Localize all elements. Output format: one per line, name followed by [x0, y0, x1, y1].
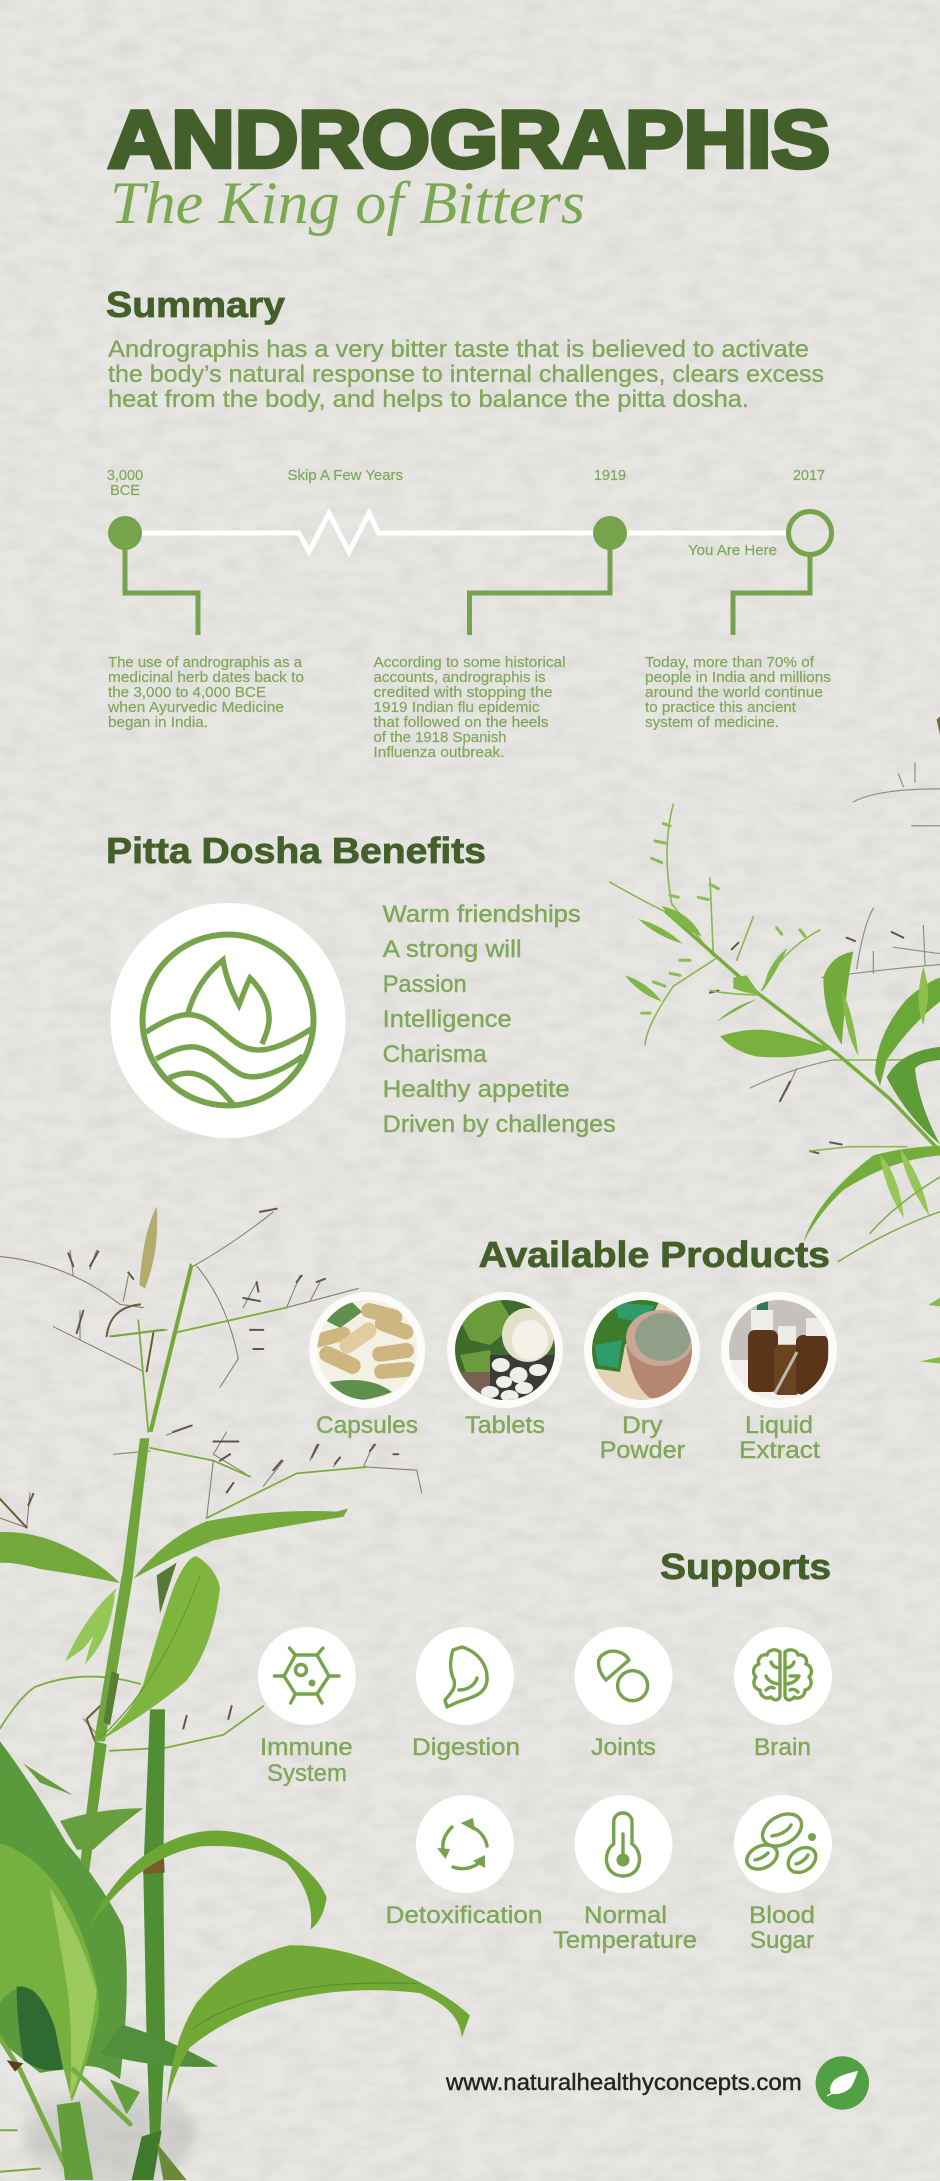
supports labels: Digestion: [412, 1734, 520, 1761]
icon: blood sugar: [734, 1795, 832, 1893]
panel: timeline: [107, 468, 832, 761]
footer: [445, 2056, 869, 2110]
text: today: people in India and millions: [645, 670, 831, 686]
plant: left stalks and leaves: [0, 1207, 470, 2181]
icon: leaf logo: [816, 2056, 869, 2110]
product: capsules: [309, 1292, 425, 1408]
summary paragraph: heat from the body, and helps to balance the pitta dosha.: [108, 386, 749, 413]
heading: supports: Supports: [660, 1546, 831, 1587]
connectors: [125, 545, 810, 635]
plant: right branch: [610, 716, 940, 1363]
text: today: to practice this ancient: [645, 700, 796, 716]
benefits list: Driven by challenges: [383, 1111, 616, 1138]
icon: brain: [734, 1627, 832, 1725]
date labels: 2017: [793, 468, 825, 484]
supports labels: Joints: [591, 1734, 656, 1761]
text: ancient origin: [107, 655, 304, 731]
text: 1919 epidemic: that followed on the heels: [374, 715, 548, 731]
text: 1919 epidemic: 1919 Indian flu epidemic: [374, 700, 540, 716]
text: today: [645, 655, 831, 731]
summary paragraph: Andrographis has a very bitter taste that is believed to activate: [108, 336, 809, 363]
supports labels: Brain: [754, 1734, 811, 1761]
benefits list: Passion: [383, 971, 467, 998]
date labels: BCE: [110, 483, 140, 499]
title: ANDROGRAPHIS: [108, 95, 830, 185]
text: today: around the world continue: [645, 685, 823, 701]
date labels: [107, 468, 825, 559]
product labels: Dry: [622, 1412, 662, 1439]
heading: summary: Summary: [106, 284, 285, 325]
supports labels: Sugar: [750, 1927, 814, 1954]
text: ancient origin: when Ayurvedic Medicine: [107, 700, 284, 716]
benefits list: Intelligence: [383, 1006, 512, 1033]
icon: normal temperature: [574, 1795, 672, 1893]
supports labels: Normal: [584, 1902, 667, 1929]
text: ancient origin: The use of andrographis as a: [108, 655, 303, 671]
supports labels: Temperature: [553, 1927, 697, 1954]
summary paragraph: the body’s natural response to internal challenges, clears excess: [108, 361, 824, 388]
product: tablets: [447, 1292, 563, 1408]
supports labels: Detoxification: [386, 1902, 542, 1929]
text: today: system of medicine.: [645, 715, 779, 731]
text: today: Today, more than 70% of: [645, 655, 815, 671]
text: 1919 epidemic: According to some historical: [374, 655, 566, 671]
product labels: Extract: [739, 1437, 820, 1464]
panel: available products: [309, 1234, 837, 1464]
text: 1919 epidemic: accounts, andrographis is: [374, 670, 546, 686]
product labels: Capsules: [316, 1412, 418, 1439]
date labels: Skip A Few Years: [288, 468, 403, 484]
panel: summary: [106, 284, 824, 413]
product: dry powder: [584, 1292, 700, 1408]
benefits list: Healthy appetite: [383, 1076, 570, 1103]
website url: www.naturalhealthyconcepts.com: [445, 2069, 802, 2095]
benefits list: A strong will: [383, 936, 522, 963]
icon: digestion: [416, 1627, 514, 1725]
timeline line with zigzag: [125, 513, 790, 552]
text: 1919 epidemic: Influenza outbreak.: [374, 745, 504, 761]
product labels: Tablets: [465, 1412, 545, 1439]
title: [108, 95, 830, 236]
product labels: Liquid: [745, 1412, 813, 1439]
text: 1919 epidemic: [374, 655, 566, 761]
benefits list: Charisma: [383, 1041, 487, 1068]
product labels: [316, 1412, 820, 1464]
panel: pitta dosha benefits: [106, 830, 616, 1138]
summary paragraph: [108, 336, 824, 413]
heading: available products: Available Products: [479, 1234, 830, 1275]
text: 1919 epidemic: credited with stopping the: [374, 685, 552, 701]
supports labels: System: [267, 1760, 347, 1787]
marker: 1919: [593, 516, 627, 550]
heading: pitta dosha: Pitta Dosha Benefits: [106, 830, 486, 871]
date labels: You Are Here: [688, 543, 777, 559]
subtitle: The King of Bitters: [110, 170, 585, 236]
product labels: Powder: [600, 1437, 685, 1464]
icon: immune system: [258, 1627, 356, 1725]
icon: detoxification: [416, 1795, 514, 1893]
panel: supports: [258, 1546, 832, 1954]
supports labels: Immune: [260, 1734, 353, 1761]
marker: 2017: [788, 512, 832, 554]
date labels: 3,000: [107, 468, 143, 484]
benefits list: Warm friendships: [383, 901, 581, 928]
benefits list: [383, 901, 616, 1138]
date labels: 1919: [594, 468, 626, 484]
supports labels: Blood: [749, 1902, 815, 1929]
product: liquid extract: [721, 1292, 837, 1408]
text: ancient origin: medicinal herb dates back to: [108, 670, 304, 686]
icon: joints: [574, 1627, 672, 1725]
supports labels: [260, 1734, 815, 1954]
icon: flame over water: [110, 903, 346, 1138]
marker: 3000 BCE: [108, 516, 142, 550]
text: 1919 epidemic: of the 1918 Spanish: [374, 730, 506, 746]
text: ancient origin: the 3,000 to 4,000 BCE: [108, 685, 266, 701]
text: ancient origin: began in India.: [108, 715, 208, 731]
